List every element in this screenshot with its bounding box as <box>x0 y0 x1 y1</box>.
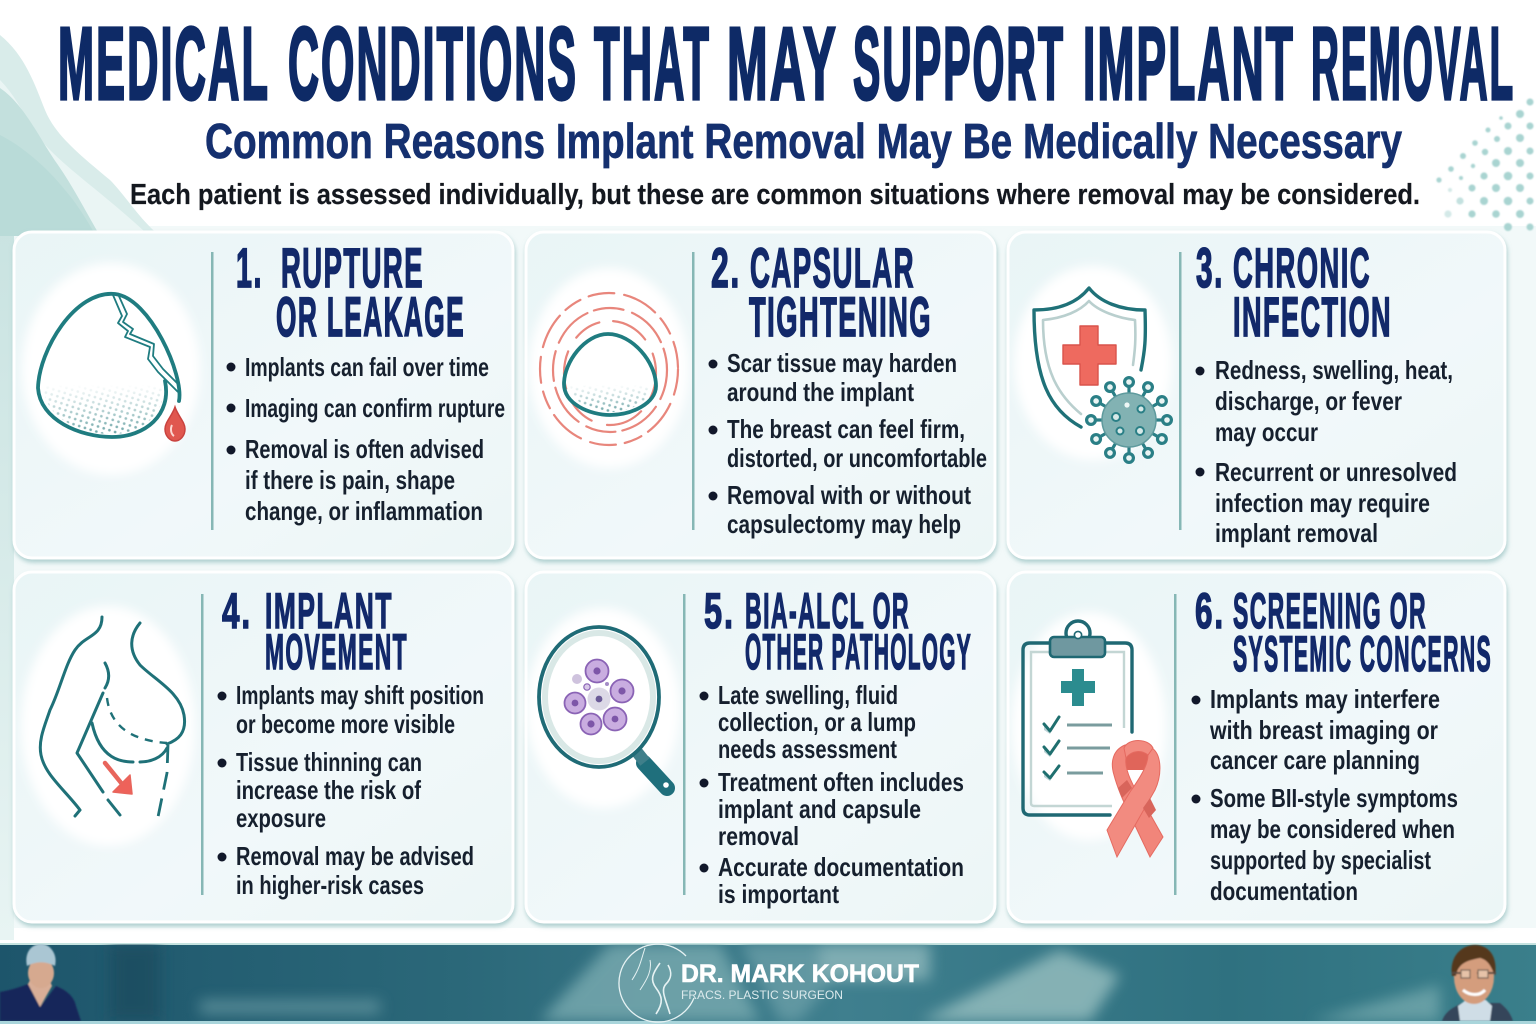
bullet list: implant removal <box>1215 518 1378 548</box>
brand name: DR. MARK KOHOUT <box>681 960 919 988</box>
bullet list: discharge, or fever <box>1215 386 1402 416</box>
heading <box>1196 236 1392 348</box>
divider <box>201 594 204 895</box>
bullet list: distorted, or uncomfortable <box>727 443 987 473</box>
logo emblem <box>619 944 694 1022</box>
halftone dots top right <box>1436 98 1534 231</box>
panel: capsular tightening: TIGHTENING <box>749 285 932 348</box>
card background <box>14 232 513 558</box>
bullet list: or become more visible <box>236 709 455 739</box>
panel: chronic infection <box>1008 232 1505 558</box>
bullet list: is important <box>718 879 839 909</box>
bullet list <box>1196 355 1457 548</box>
bullet list: Removal with or without <box>727 480 971 510</box>
title: MEDICAL <box>58 6 270 121</box>
heading: 3. <box>1196 236 1224 299</box>
brand subtitle: FRACS. PLASTIC SURGEON <box>681 988 843 1002</box>
bullet list: Scar tissue may harden <box>727 348 957 378</box>
bullet list: Implants may interfere <box>1210 684 1440 714</box>
bullet list: Imaging can confirm rupture <box>245 393 505 423</box>
bullet list: Some BII-style symptoms <box>1210 783 1458 813</box>
icon: clipboard with awareness ribbon <box>1012 612 1166 857</box>
bullet list: Implants can fail over time <box>245 352 489 382</box>
bullet list <box>700 680 964 909</box>
heading: IMPLANT <box>265 583 393 639</box>
bullet list <box>1192 684 1458 906</box>
panel: BIA-ALCL or other pathology <box>526 572 995 922</box>
bullet list: if there is pain, shape <box>245 465 455 495</box>
divider <box>683 594 686 895</box>
bullet list: Removal is often advised <box>245 434 484 464</box>
icon: magnifying glass with cells <box>526 608 680 808</box>
surgeon photo left <box>0 944 81 1021</box>
title: SUPPORT <box>853 6 1065 121</box>
panel: implant movement: MOVEMENT <box>265 624 408 680</box>
card background <box>1008 572 1505 922</box>
bullet list: The breast can feel firm, <box>727 414 965 444</box>
heading <box>711 236 932 348</box>
bullet list: exposure <box>236 803 326 833</box>
heading: 4. <box>222 583 252 639</box>
bullet list: change, or inflammation <box>245 496 483 526</box>
panel: rupture or leakage: OR LEAKAGE <box>276 285 465 348</box>
blurred operating room backdrop <box>110 944 1440 1021</box>
card background <box>1008 232 1505 558</box>
heading: 5. <box>704 583 735 639</box>
heading: CAPSULAR <box>750 236 915 299</box>
bullet list <box>708 348 987 539</box>
divider <box>1179 252 1182 530</box>
heading: 2. <box>711 236 741 299</box>
bullet list: documentation <box>1210 876 1358 906</box>
bullet list: Late swelling, fluid <box>718 680 898 710</box>
divider <box>1174 594 1176 895</box>
panel: rupture or leakage <box>14 232 513 558</box>
bullet list: in higher-risk cases <box>236 870 424 900</box>
bullet list: may occur <box>1215 417 1318 447</box>
icon: implant with capsular rings <box>529 268 689 468</box>
bullet list: Removal may be advised <box>236 841 474 871</box>
bullet list: Tissue thinning can <box>236 747 422 777</box>
bullet list: Redness, swelling, heat, <box>1215 355 1453 385</box>
bullet list: with breast imaging or <box>1209 715 1438 745</box>
bullet list: implant and capsule <box>718 794 921 824</box>
bullet list: Accurate documentation <box>718 852 964 882</box>
bullet list: infection may require <box>1215 488 1430 518</box>
card background <box>526 572 995 922</box>
title: MAY <box>727 6 838 121</box>
icon: shield and virus <box>1014 266 1172 462</box>
heading <box>222 583 408 680</box>
title: THAT <box>594 6 711 121</box>
bullet list: removal <box>718 821 799 851</box>
text: OTHER PATHOLOGY <box>745 624 972 680</box>
heading <box>704 583 972 680</box>
icon: torso with displaced implant <box>21 606 195 846</box>
heading <box>236 236 465 348</box>
heading: RUPTURE <box>281 236 424 299</box>
surgeon photo right <box>1442 945 1513 1021</box>
footer banner <box>0 943 1536 1024</box>
bullet list: supported by specialist <box>1210 845 1431 875</box>
heading: 6. <box>1195 583 1225 639</box>
panel: implant movement <box>14 572 513 922</box>
divider <box>692 252 694 530</box>
bullet list: increase the risk of <box>236 775 421 805</box>
bullet list: collection, or a lump <box>718 707 916 737</box>
icon: ruptured implant with blood drop <box>22 263 200 475</box>
divider <box>211 252 214 530</box>
card background <box>14 572 513 922</box>
bullet list: may be considered when <box>1210 814 1455 844</box>
title <box>58 6 1515 121</box>
bullet list: needs assessment <box>718 734 897 764</box>
title: CONDITIONS <box>288 6 578 121</box>
panel: screening or systemic concerns <box>1008 572 1505 922</box>
bullet list: Recurrent or unresolved <box>1215 457 1457 487</box>
heading: 1. <box>236 236 263 299</box>
bullet list: capsulectomy may help <box>727 509 961 539</box>
bullet list: cancer care planning <box>1210 745 1420 775</box>
heading: BIA-ALCL OR <box>745 583 910 639</box>
bullet list: Treatment often includes <box>718 767 964 797</box>
bullet list: Implants may shift position <box>236 680 484 710</box>
panel: capsular tightening <box>526 232 995 558</box>
heading <box>1195 583 1492 682</box>
heading: CHRONIC <box>1233 236 1371 299</box>
bullet list: around the implant <box>727 377 914 407</box>
bullet list <box>218 680 484 900</box>
card background <box>526 232 995 558</box>
intro text: Each patient is assessed individually, but these are common situations where removal may be considered. <box>130 179 1420 211</box>
bullet list <box>226 352 505 526</box>
